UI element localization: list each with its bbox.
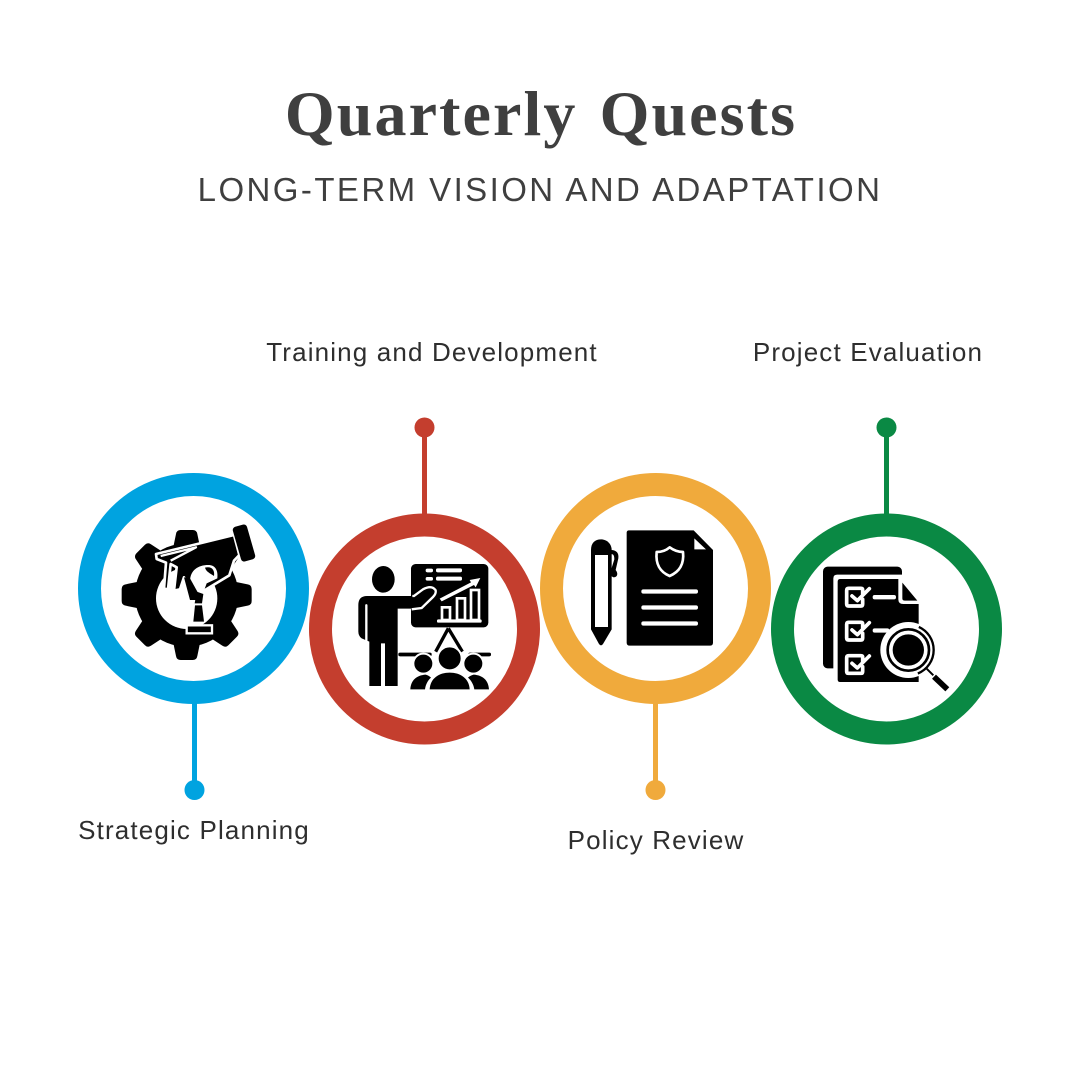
connector: orange: [646, 700, 666, 800]
ring: blue: [90, 484, 298, 692]
ring: green: [782, 525, 990, 733]
label: Strategic Planning: Strategic Planning: [78, 815, 310, 845]
icon: pen and policy document: [591, 530, 713, 646]
connector: blue: [184, 700, 204, 800]
connector: green: [876, 418, 896, 518]
icon: presenter with chart board and audience: [358, 564, 491, 689]
icon: hand moving chess piece on gear: [122, 524, 256, 660]
ring: red: [320, 525, 528, 733]
label: Policy Review: Policy Review: [568, 825, 744, 855]
ring: orange: [552, 484, 760, 692]
label: Training and Development: Training and Development: [266, 337, 598, 367]
title: Quarterly Quests: [285, 78, 797, 149]
label: Project Evaluation: Project Evaluation: [753, 337, 983, 367]
connector: red: [414, 418, 434, 518]
magnifier: [880, 622, 947, 689]
subtitle: LONG-TERM VISION AND ADAPTATION: [198, 171, 882, 208]
icon: checklist with magnifier: [823, 567, 947, 689]
